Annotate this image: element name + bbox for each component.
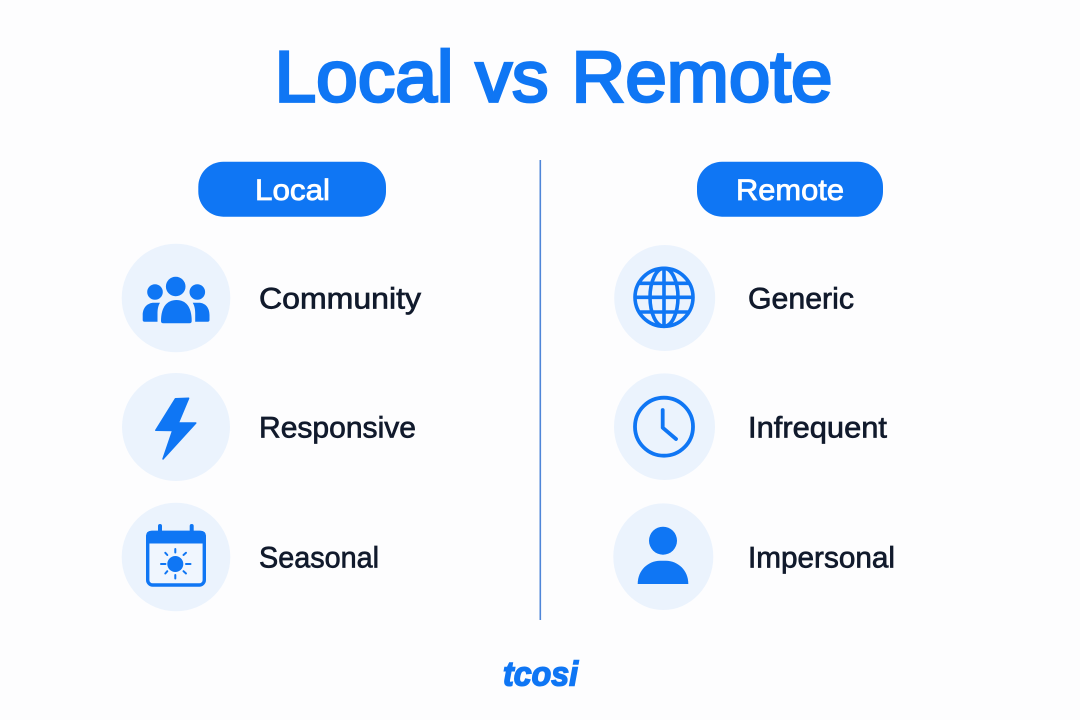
title: [274, 38, 832, 118]
label: Generic: [748, 282, 854, 316]
logo: tcosi: tcosi: [503, 656, 579, 694]
label: Impersonal: [748, 542, 895, 574]
icon: people: [143, 277, 210, 323]
item: Community: [122, 244, 421, 352]
icon: lightning bolt: [156, 398, 196, 459]
icon: calendar with sun: [146, 524, 206, 585]
heading pill: Remote: [697, 162, 883, 217]
item: Impersonal: [613, 503, 895, 610]
item: Generic: [614, 245, 854, 351]
label: Infrequent: [748, 412, 888, 444]
label: Responsive: [259, 412, 416, 444]
item: Infrequent: [614, 373, 888, 480]
icon: clock: [635, 398, 693, 456]
item: Responsive: [122, 373, 416, 481]
panel: remote: [613, 162, 895, 610]
label: Community: [259, 282, 421, 316]
heading pill: Local: Local: [255, 174, 330, 207]
title: Remote: [572, 38, 832, 118]
label: Seasonal: [259, 542, 379, 574]
title: vs: [476, 38, 548, 118]
title: Local: [274, 38, 454, 118]
heading pill: Remote: Remote: [736, 174, 844, 207]
center divider line: [540, 160, 541, 620]
item: Seasonal: [122, 503, 379, 611]
heading pill: Local: [198, 162, 386, 217]
icon: person: [638, 527, 688, 584]
panel: local: [122, 162, 421, 611]
icon: globe: [635, 268, 693, 326]
